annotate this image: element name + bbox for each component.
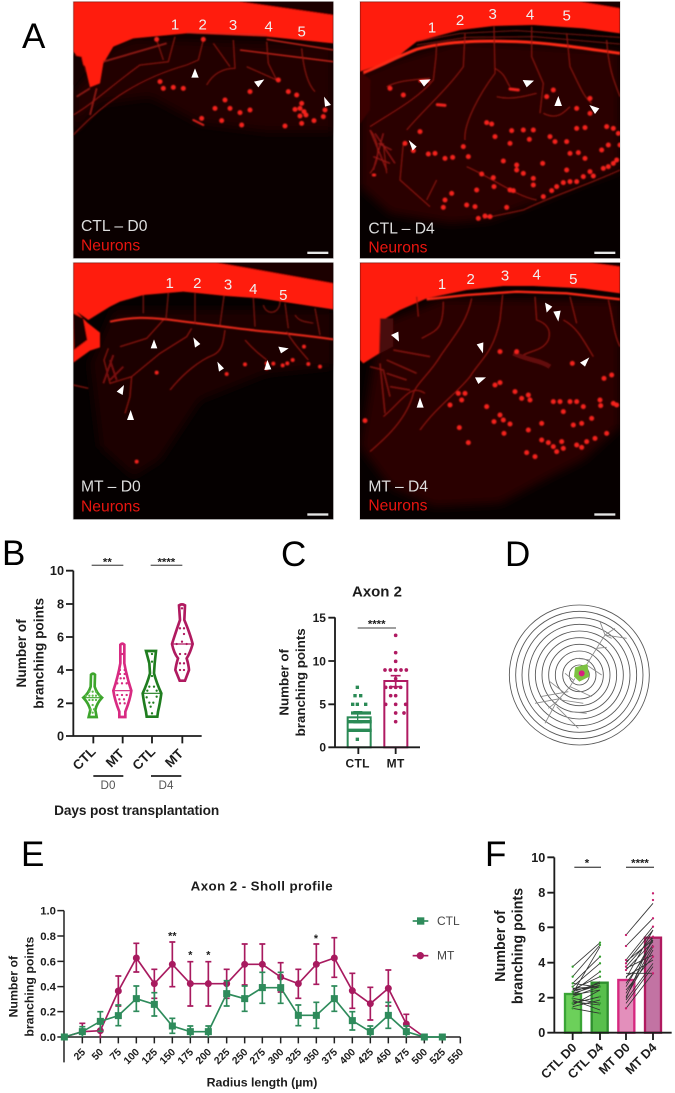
significance marks: *: [585, 858, 590, 870]
x-axis tick labels: 525: [428, 1047, 448, 1067]
x-axis category labels: CTL D4: [565, 1041, 606, 1082]
x-axis tick labels: 550: [446, 1047, 466, 1067]
x-axis category labels: [538, 1041, 659, 1082]
micrograph: CTL D0: 3: [229, 17, 237, 34]
micrograph: MT D4: 1: [438, 276, 446, 293]
y-axis title: [14, 598, 46, 709]
category labels: CTL: [346, 756, 370, 770]
bar chart: Axon 2: [276, 584, 420, 770]
x-axis tick labels: 75: [108, 1047, 124, 1063]
paired lines MT: [626, 903, 653, 1008]
x-axis tick labels: [72, 1047, 466, 1067]
significance stars: *: [188, 950, 193, 962]
category labels: MT: [387, 756, 405, 770]
bar chart: Axon 2: 0: [319, 741, 326, 755]
line chart: Sholl profile: 0.6: [40, 956, 56, 968]
panel label C: C: [281, 535, 306, 574]
micrograph: CTL D0: 1: [171, 16, 179, 33]
y-axis title: [276, 628, 308, 736]
micrograph: MT D4: 5: [569, 271, 578, 288]
micrograph: CTL D4: [359, 1, 621, 259]
micrograph: MT D0: 5: [279, 287, 288, 304]
traced neuron arbor: [535, 622, 627, 728]
micrograph: MT D0: MT – D0: [81, 479, 141, 496]
micrograph: CTL D4: Neurons: [368, 240, 428, 257]
x-axis tick labels: 125: [140, 1047, 160, 1067]
x-axis tick labels: 25: [72, 1047, 88, 1063]
paired bar chart: 2: [538, 991, 545, 1005]
day groups: D4: [159, 779, 174, 792]
y-axis title: Number of: [493, 910, 509, 982]
y-axis title: branching points: [293, 628, 308, 736]
micrograph: CTL D4: 1: [428, 19, 436, 36]
bar chart: Axon 2: 15: [313, 611, 326, 625]
paired bar chart: 10: [531, 851, 545, 865]
micrograph: MT D4: [359, 262, 621, 520]
micrograph: CTL D4: 3: [488, 6, 497, 23]
CTL dots: [350, 687, 370, 739]
micrograph: CTL D0: 5: [297, 24, 306, 41]
y-axis title: Number of: [14, 619, 29, 687]
chart title: Axon 2 - Sholl profile: [191, 879, 333, 894]
paired bar chart: [493, 851, 672, 1082]
x-axis tick labels: 400: [338, 1047, 358, 1067]
significance stars: *: [314, 933, 319, 945]
x-axis category labels: CTL: [129, 744, 158, 773]
bars: [565, 938, 661, 1033]
paired bar chart: 0: [538, 1026, 545, 1040]
significance stars: **: [168, 930, 177, 942]
day groups: D0: [101, 779, 116, 792]
micrograph: MT D4: 3: [501, 268, 509, 285]
x-axis tick labels: 500: [410, 1047, 430, 1067]
legend: MT: [437, 949, 455, 963]
micrograph: CTL D4: CTL – D4: [368, 220, 435, 237]
series: MT: [64, 938, 424, 1038]
micrograph: CTL D0: [73, 1, 334, 259]
micrograph: MT D0: Neurons: [81, 499, 140, 516]
micrograph: MT D4: 2: [466, 271, 475, 288]
day groups: [93, 776, 181, 792]
neuron soma: [574, 664, 589, 682]
micrograph: MT D4: 4: [532, 266, 541, 283]
x-axis category labels: [70, 744, 186, 773]
y-axis title: [493, 888, 526, 1004]
paired lines CTL: [573, 943, 600, 1013]
micrograph: MT D4: Neurons: [368, 498, 428, 515]
violin chart: branching points by day: 4: [57, 663, 64, 677]
violin: CTL D0: [83, 674, 102, 717]
series: CTL: [64, 972, 442, 1037]
y-axis title: Number of: [6, 955, 20, 1017]
x-axis category labels: CTL: [70, 744, 99, 773]
micrograph: MT D0: [73, 262, 334, 520]
x-axis tick labels: 450: [374, 1047, 394, 1067]
violin: MT D4: [172, 604, 193, 681]
x-axis tick labels: 300: [266, 1047, 287, 1067]
micrograph: CTL D0: 4: [264, 19, 273, 36]
x-axis title: Radius length (µm): [207, 1076, 317, 1090]
x-axis category labels: MT: [162, 746, 186, 770]
line chart: Sholl profile: 0.0: [40, 1032, 56, 1044]
y-axis title: branching points: [22, 937, 36, 1037]
line chart: Sholl profile: 0.4: [40, 982, 57, 994]
line chart: Sholl profile: 0.8: [40, 931, 56, 943]
micrograph: CTL D0: 2: [198, 16, 207, 33]
Sholl concentric diagram: [509, 605, 649, 745]
x-axis tick labels: 100: [122, 1047, 142, 1067]
significance stars: [168, 930, 319, 962]
micrograph: CTL D0: Neurons: [81, 238, 140, 255]
panel label E: E: [21, 835, 44, 874]
violin chart: branching points by day: 6: [57, 630, 64, 644]
violin chart: branching points by day: 8: [57, 597, 64, 611]
bar chart: Axon 2: 10: [313, 654, 326, 668]
panel label A: A: [22, 17, 46, 56]
panel label D: D: [505, 535, 530, 574]
x-axis tick labels: 350: [302, 1047, 322, 1067]
micrograph: CTL D4: 5: [562, 8, 571, 25]
x-axis tick labels: 175: [176, 1047, 196, 1067]
significance marks: [574, 858, 654, 870]
violin chart: branching points by day: 2: [57, 697, 64, 711]
concentric rings: [509, 605, 649, 745]
violin: CTL D4: [143, 651, 161, 717]
significance marks: [92, 556, 182, 568]
x-axis tick labels: 225: [212, 1047, 233, 1067]
y-axis title: branching points: [510, 888, 526, 1004]
significance mark: [358, 618, 396, 630]
line chart: Sholl profile: 1.0: [40, 906, 56, 918]
y-axis title: [6, 937, 36, 1037]
x-axis category labels: MT D4: [623, 1041, 659, 1077]
legend: [413, 914, 460, 963]
violin chart: branching points by day: 0: [57, 729, 64, 743]
paired bar chart: 4: [538, 956, 545, 970]
micrograph: MT D0: 4: [249, 281, 258, 298]
significance marks: ****: [158, 556, 176, 568]
violin: MT D0: [113, 644, 131, 717]
x-axis tick labels: 325: [284, 1047, 304, 1067]
y-axis title: Number of: [276, 648, 291, 716]
x-axis category labels: CTL D0: [538, 1041, 579, 1082]
legend: CTL: [437, 914, 460, 928]
category labels: [346, 756, 405, 770]
micrograph: MT D0: 2: [193, 275, 202, 292]
y-axis title: branching points: [31, 598, 46, 709]
x-axis tick labels: 425: [356, 1047, 376, 1067]
significance stars: *: [206, 950, 211, 962]
micrograph: CTL D0: CTL – D0: [81, 218, 148, 235]
significance marks: ****: [631, 858, 649, 870]
significance mark: ****: [368, 618, 386, 630]
x-axis tick labels: 375: [320, 1047, 340, 1067]
line chart: Sholl profile: [6, 879, 466, 1090]
bar chart: Axon 2: 5: [319, 698, 326, 712]
paired dots: [573, 893, 653, 1013]
micrograph: CTL D4: 4: [526, 6, 534, 23]
micrograph: MT D0: 3: [224, 276, 232, 293]
error bars: [353, 712, 362, 723]
panel label B: B: [2, 534, 25, 573]
line chart: Sholl profile: 0.2: [40, 1007, 56, 1019]
x-axis tick labels: 250: [230, 1047, 251, 1067]
micrograph: CTL D4: 2: [456, 12, 464, 29]
paired bar chart: 8: [538, 886, 545, 900]
significance marks: **: [103, 556, 112, 568]
x-axis title: Days post transplantation: [54, 803, 219, 818]
micrograph: MT D0: 1: [165, 275, 174, 292]
x-axis tick labels: 275: [248, 1047, 268, 1067]
x-axis tick labels: 200: [194, 1047, 214, 1067]
x-axis category labels: MT D0: [596, 1041, 633, 1077]
chart title: Axon 2: [352, 584, 402, 601]
MT dots: [385, 635, 406, 722]
panel label F: F: [485, 835, 506, 874]
micrograph: MT D4: MT – D4: [368, 479, 428, 496]
x-axis tick labels: 475: [392, 1047, 412, 1067]
x-axis category labels: MT: [103, 746, 127, 770]
violin chart: branching points by day: [14, 556, 219, 818]
x-axis tick labels: 150: [158, 1047, 178, 1067]
violin chart: branching points by day: 10: [50, 564, 64, 578]
x-axis tick labels: 50: [90, 1047, 106, 1063]
paired bar chart: 6: [538, 921, 545, 935]
